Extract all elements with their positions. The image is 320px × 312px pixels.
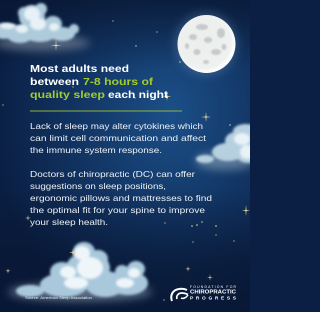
paragraph: cytokines: [30, 121, 207, 155]
heading rule: [30, 110, 182, 112]
paragraph: cytokines: Lack of sleep may alter cytokines which: [30, 121, 203, 131]
source note: Source: American Sleep Association: [25, 296, 92, 300]
paragraph: doctors of chiropractic: the optimal fit for your spine to improve: [30, 205, 205, 215]
paragraph: doctors of chiropractic: suggestions on sleep positions,: [30, 181, 166, 191]
heading: [30, 63, 169, 101]
logo wordmark: CHIROPRACTIC: [190, 290, 236, 296]
paragraph: doctors of chiropractic: [30, 169, 212, 227]
logo icon: [171, 289, 188, 301]
cloud: bottom: [8, 242, 152, 301]
logo: Foundation for Chiropractic Progress: [171, 285, 237, 302]
paragraph: doctors of chiropractic: Doctors of chiropractic (DC) can offer: [30, 169, 195, 179]
paragraph: doctors of chiropractic: ergonomic pillows and mattresses to find: [30, 193, 212, 203]
cloud: top left: [0, 3, 90, 51]
heading: 7-8 hours of: [83, 76, 154, 88]
heading: Most adults need: [30, 63, 129, 75]
heading: each night: [108, 89, 169, 101]
cloud: right edge: [195, 124, 262, 170]
logo wordmark: [190, 285, 237, 302]
logo wordmark: PROGRESS: [190, 296, 237, 302]
stars: [2, 20, 250, 301]
paragraph: cytokines: the immune system response.: [30, 145, 162, 155]
moon: [174, 12, 238, 76]
paragraph: cytokines: can limit cell communication and affect: [30, 133, 207, 143]
logo wordmark: FOUNDATION FOR: [190, 285, 237, 289]
heading: between: [30, 76, 79, 88]
heading: quality sleep: [30, 89, 105, 101]
paragraph: doctors of chiropractic: your sleep health.: [30, 217, 108, 227]
infographic canvas: [0, 0, 250, 312]
background: night sky: [0, 0, 250, 312]
